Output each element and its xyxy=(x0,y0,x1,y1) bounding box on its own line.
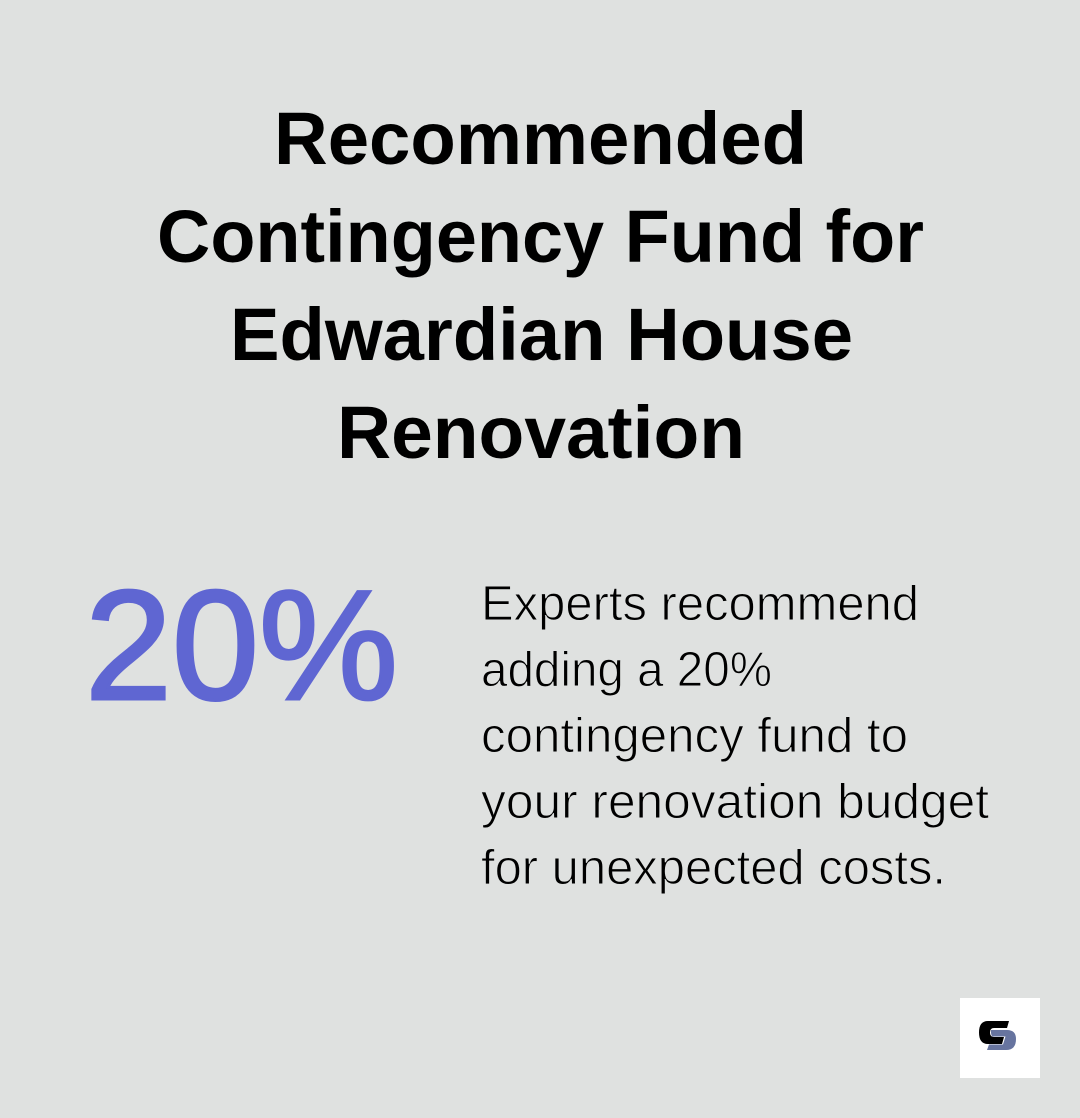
description text xyxy=(481,577,989,895)
logo badge xyxy=(960,998,1040,1078)
description text: your renovation budget xyxy=(481,775,989,829)
title: Renovation xyxy=(337,391,745,474)
description text: for unexpected costs. xyxy=(481,841,946,895)
title: Edwardian House xyxy=(230,293,853,376)
title: Contingency Fund for xyxy=(157,195,924,278)
icon: logo S blue stroke xyxy=(987,1030,1016,1050)
icon: logo S black stroke xyxy=(979,1021,1009,1044)
description text: contingency fund to xyxy=(481,709,908,763)
big statistic: 20%: 20% xyxy=(85,559,398,733)
description text: Experts recommend xyxy=(481,577,919,631)
description text: adding a 20% xyxy=(481,643,772,697)
title xyxy=(157,97,924,474)
title: Recommended xyxy=(274,97,807,180)
